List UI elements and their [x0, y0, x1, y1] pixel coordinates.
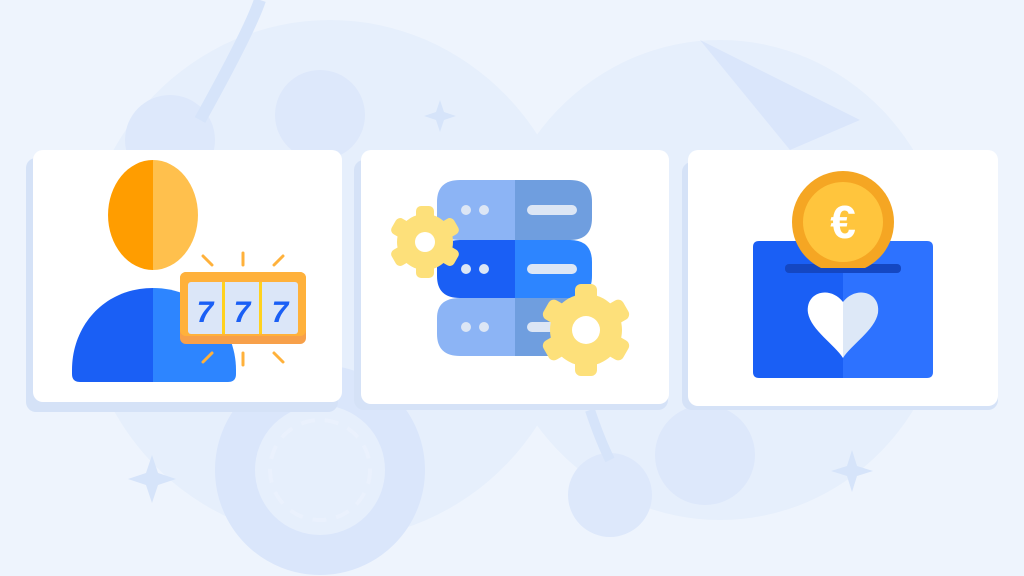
- icon: slot machine 777: 7: [197, 296, 215, 329]
- card 2: servers with gears: [354, 150, 669, 410]
- card 1: player with slot: [26, 150, 342, 412]
- icon: donation box: [753, 241, 933, 378]
- icon: coin euro: [792, 171, 894, 273]
- icon: server stack: [437, 180, 592, 356]
- icon: body: [72, 288, 236, 382]
- icon: slot machine 777: 7: [272, 296, 290, 329]
- icon: head: [108, 160, 198, 270]
- icon: coin euro: €: [830, 196, 856, 248]
- icon: gear large: [541, 284, 631, 376]
- icon: gear small: [389, 206, 461, 278]
- icon: slot machine 777: [180, 253, 306, 365]
- card 3: donation box: [682, 150, 998, 410]
- icon: slot machine 777: 7: [234, 296, 252, 329]
